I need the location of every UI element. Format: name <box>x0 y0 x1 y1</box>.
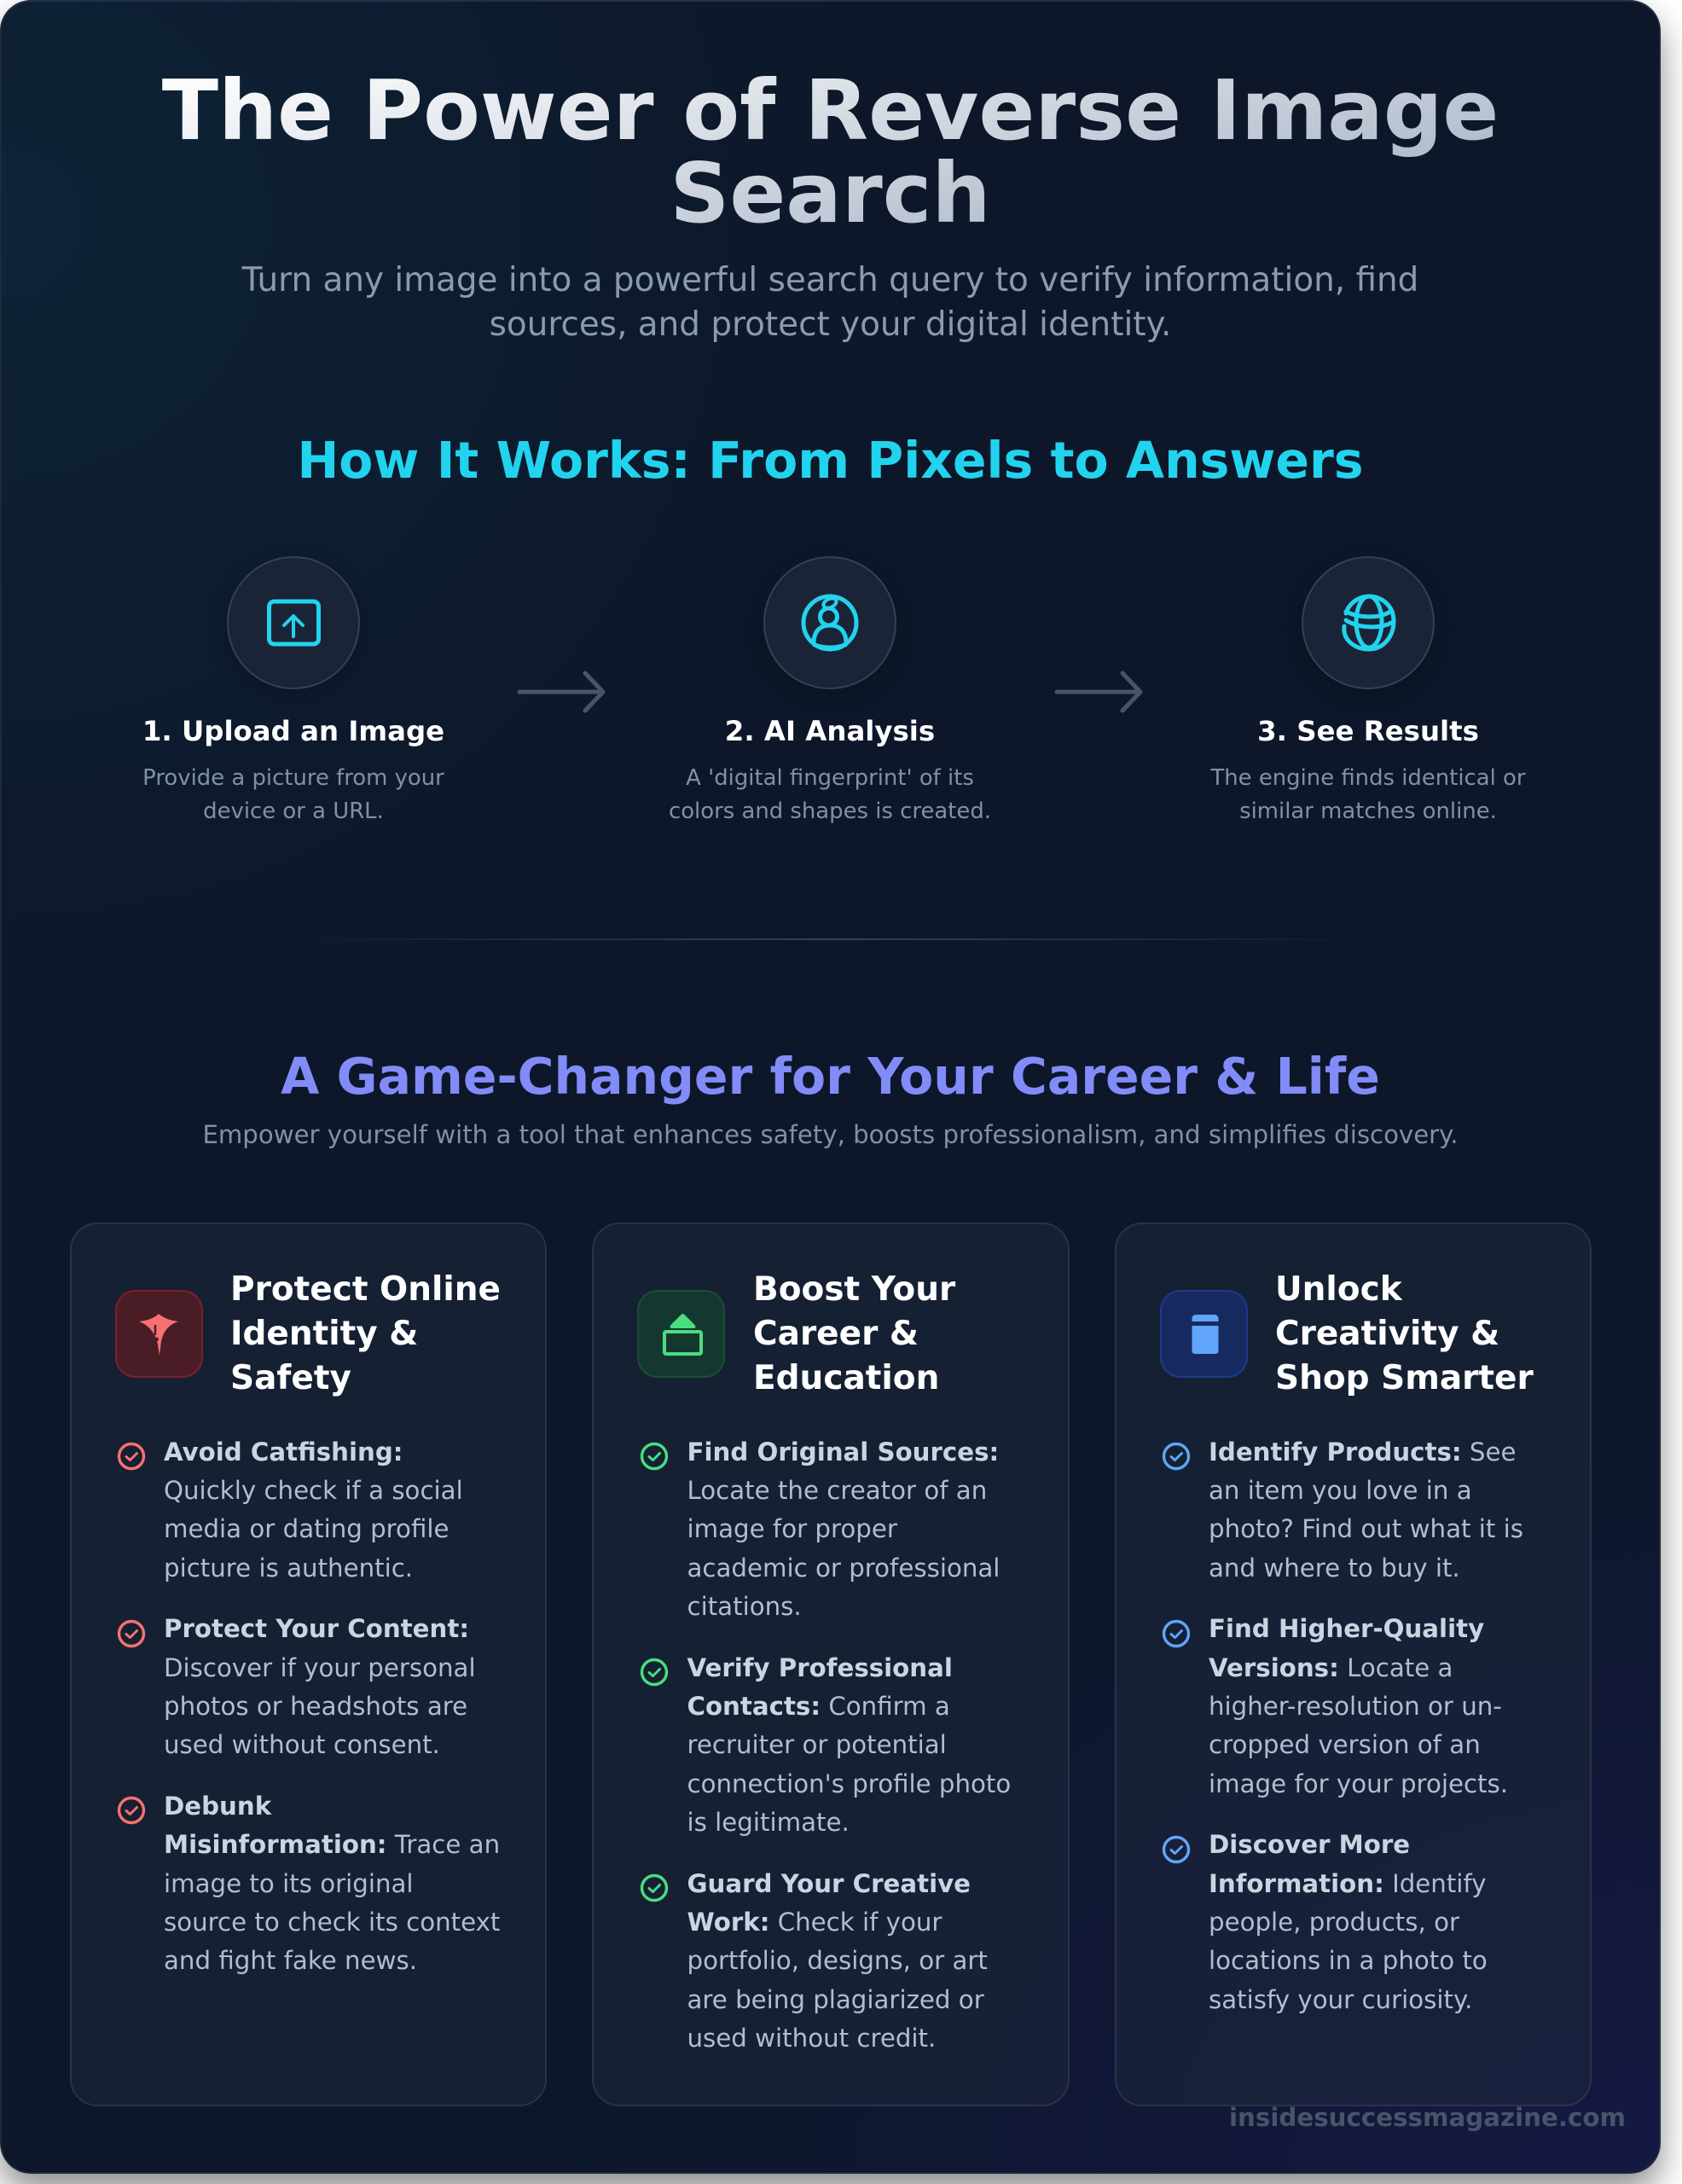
benefits list <box>118 1438 500 1975</box>
item: cropped version of an <box>1209 1730 1481 1759</box>
subtitle: Turn any image into a powerful search query to verify information, find <box>242 261 1418 299</box>
card heading: Boost Your <box>753 1270 955 1309</box>
item <box>118 1614 476 1759</box>
card heading: Protect Online <box>230 1270 501 1309</box>
item: media or dating profile <box>164 1514 450 1543</box>
item: portfolio, designs, or art <box>687 1946 988 1975</box>
item <box>1160 1826 1569 2019</box>
item: Verify Professional <box>687 1653 953 1682</box>
card heading: Career & <box>753 1315 919 1353</box>
panel: unlock creativity <box>1114 1223 1592 2106</box>
item: and fight fake news. <box>164 1946 417 1975</box>
arrow 2 <box>1054 671 1143 713</box>
icon: briefcase <box>637 1290 725 1378</box>
step 1 text <box>142 715 444 824</box>
card heading <box>753 1270 955 1397</box>
heading: game changer: A Game-Changer for Your Career & Life <box>281 1048 1380 1106</box>
step 2 text: 2. AI Analysis <box>725 715 935 747</box>
card heading: Shop Smarter <box>1275 1359 1534 1397</box>
card heading: Creativity & <box>1275 1315 1499 1353</box>
item <box>1160 1610 1569 1804</box>
icon: shopping jar <box>1160 1290 1247 1378</box>
title: Search <box>670 145 991 241</box>
item: Identify Products: See <box>1209 1438 1516 1467</box>
item: Work: Check if your <box>687 1908 942 1937</box>
item: image to its original <box>164 1869 414 1898</box>
item: Discover More <box>1209 1830 1410 1859</box>
item: satisfy your curiosity. <box>1209 1985 1472 2014</box>
benefits list <box>638 1433 1047 2081</box>
item: Find Original Sources: <box>687 1438 999 1467</box>
step 2 text <box>669 715 991 824</box>
item: Contacts: Confirm a <box>687 1692 950 1721</box>
card heading <box>230 1270 501 1397</box>
panel: boost career <box>592 1223 1070 2106</box>
watermark: insidesuccessmagazine.com <box>1229 2103 1626 2132</box>
step 1 text: device or a URL. <box>203 799 384 824</box>
item: used without credit. <box>687 2024 936 2053</box>
panel: protect online identity <box>70 1223 546 2106</box>
step 3 text <box>1210 715 1526 824</box>
item: locations in a photo to <box>1209 1946 1488 1975</box>
item: Discover if your personal <box>164 1653 476 1682</box>
item: citations. <box>687 1592 802 1621</box>
card heading <box>1275 1268 1534 1401</box>
card heading: Education <box>753 1359 939 1397</box>
heading: how it works: How It Works: From Pixels to Answers <box>297 432 1364 490</box>
item <box>638 1649 1047 1843</box>
item <box>638 1865 1047 2059</box>
step 3 text: similar matches online. <box>1239 799 1497 824</box>
item <box>118 1438 463 1583</box>
item: Misinformation: Trace an <box>164 1830 500 1859</box>
item: academic or professional <box>687 1554 1000 1583</box>
step 3 text: The engine finds identical or <box>1210 764 1526 790</box>
item: Guard Your Creative <box>687 1869 971 1898</box>
section subtitle: Empower yourself with a tool that enhances safety, boosts professionalism, and simplifies discovery. <box>202 1120 1459 1149</box>
item: and where to buy it. <box>1209 1554 1460 1583</box>
item: Locate the creator of an <box>687 1476 987 1505</box>
item: Avoid Catfishing: <box>164 1438 403 1467</box>
step 1 icon circle: upload <box>227 556 360 689</box>
item: Versions: Locate a <box>1209 1653 1453 1682</box>
item: Find Higher-Quality <box>1209 1614 1484 1643</box>
icon: warning shield <box>114 1290 203 1378</box>
item: Quickly check if a social <box>164 1476 463 1505</box>
item <box>118 1792 500 1975</box>
item: is legitimate. <box>687 1808 850 1837</box>
item: used without consent. <box>164 1730 440 1759</box>
step 2 text: A 'digital fingerprint' of its <box>686 764 974 790</box>
item: photo? Find out what it is <box>1209 1514 1523 1543</box>
card heading: Unlock <box>1275 1270 1402 1309</box>
step 3 text: 3. See Results <box>1257 715 1479 747</box>
item <box>638 1433 1047 1627</box>
item: an item you love in a <box>1209 1476 1472 1505</box>
item: Protect Your Content: <box>164 1614 469 1643</box>
item: people, products, or <box>1209 1908 1459 1937</box>
card heading: Safety <box>230 1359 351 1397</box>
step 1 text: 1. Upload an Image <box>142 715 444 747</box>
step 2 text: colors and shapes is created. <box>669 799 991 824</box>
item: source to check its context <box>164 1908 500 1937</box>
step 1 text: Provide a picture from your <box>142 764 444 790</box>
item: recruiter or potential <box>687 1730 947 1759</box>
item: image for your projects. <box>1209 1769 1508 1798</box>
card heading: Identity & <box>230 1315 418 1353</box>
item: are being plagiarized or <box>687 1985 984 2014</box>
item: photos or headshots are <box>164 1692 467 1721</box>
step 2 icon circle: user <box>763 556 896 689</box>
item: connection's profile photo <box>687 1769 1011 1798</box>
benefits list <box>1160 1433 1569 2042</box>
item: Debunk <box>164 1792 271 1821</box>
item: higher-resolution or un- <box>1209 1692 1502 1721</box>
step 3 icon circle: globe <box>1302 556 1435 689</box>
subtitle: sources, and protect your digital identity. <box>490 305 1171 343</box>
title: The Power of Reverse Image <box>162 62 1499 159</box>
title <box>162 62 1499 241</box>
item: Information: Identify <box>1209 1869 1487 1898</box>
item <box>1160 1433 1569 1588</box>
item: image for proper <box>687 1514 897 1543</box>
subtitle <box>242 261 1418 343</box>
arrow 1 <box>517 671 606 713</box>
item: picture is authentic. <box>164 1554 413 1583</box>
